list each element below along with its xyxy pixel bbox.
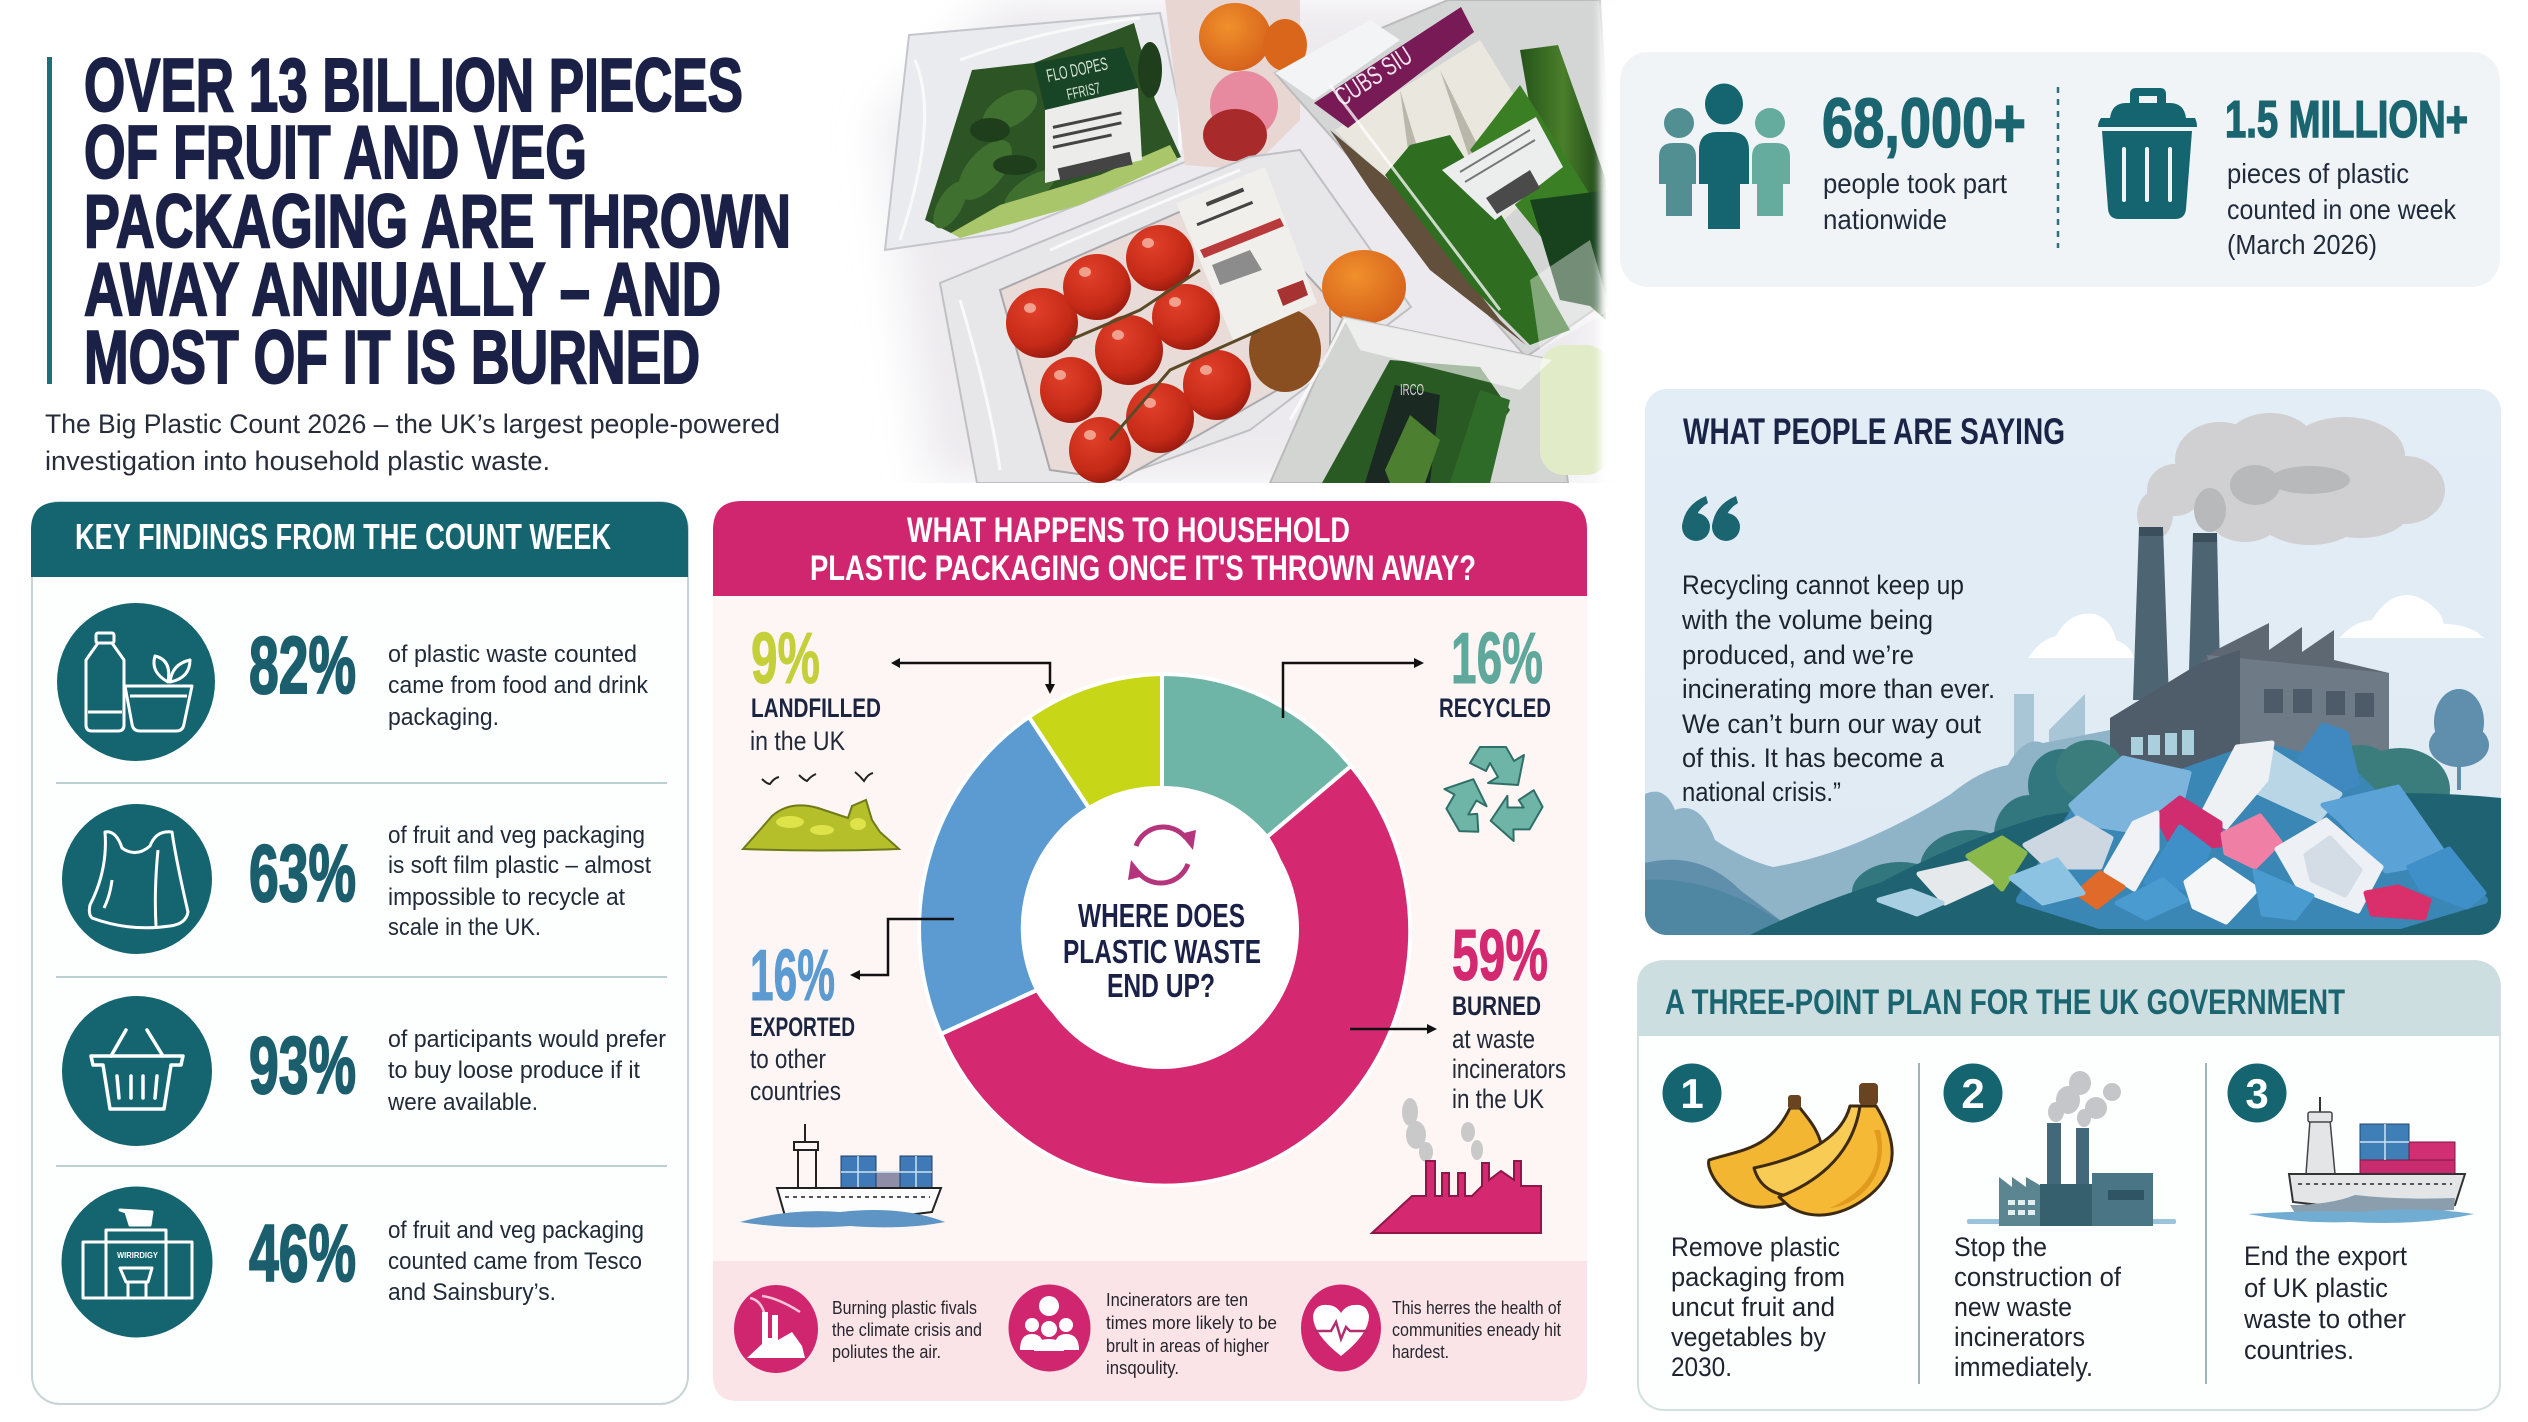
icon: heart with pulse bbox=[1301, 1284, 1381, 1372]
text: health: communities eneady hit bbox=[1392, 1320, 1561, 1340]
text: plan 2: immediately. bbox=[1954, 1352, 2093, 1382]
title accent bar bbox=[47, 57, 52, 384]
quote text: produced, and we’re bbox=[1682, 640, 1914, 670]
plan header bbox=[1637, 961, 2500, 1036]
text: plan 1 bbox=[1671, 1232, 1845, 1382]
text: burning plastic: Burning plastic fivals bbox=[832, 1298, 977, 1318]
key findings header bbox=[31, 502, 688, 577]
title: MOST OF IT IS BURNED bbox=[84, 315, 700, 399]
badge: 2 bbox=[1944, 1064, 2002, 1122]
text: plan 1: uncut fruit and bbox=[1671, 1292, 1835, 1322]
panel: headline stats bbox=[1620, 52, 2500, 287]
hero photo: packaged fruit and vegetables: IRCO bbox=[1400, 382, 1424, 399]
text: plan 2 bbox=[1954, 1232, 2121, 1382]
text: incinerators: Incinerators are ten bbox=[1106, 1290, 1248, 1310]
text: 63% description: impossible to recycle at bbox=[388, 884, 625, 911]
quote text: Recycling cannot keep up bbox=[1682, 570, 1964, 600]
label: 16% exported: to other bbox=[750, 1044, 826, 1074]
text: 82% description: of plastic waste counted bbox=[388, 641, 637, 668]
subtitle: The Big Plastic Count 2026 – the UK’s largest people-powered bbox=[45, 409, 780, 439]
icon: factory bbox=[1967, 1071, 2176, 1226]
text: 63% description: is soft film plastic – almost bbox=[388, 852, 651, 879]
label: 9% landfilled bbox=[750, 619, 881, 756]
hero photo: packaged fruit and vegetables: FLO DOPES bbox=[1045, 53, 1109, 86]
text: plan 2: incinerators bbox=[1954, 1322, 2085, 1352]
text: plan 3 bbox=[2243, 1241, 2407, 1365]
plan header: A THREE-POINT PLAN FOR THE UK GOVERNMENT bbox=[1665, 983, 2345, 1022]
label: 16% recycled: RECYCLED bbox=[1439, 693, 1551, 723]
text: incinerators bbox=[1106, 1290, 1277, 1378]
text: people took part: nationwide bbox=[1823, 204, 1947, 235]
icon: circular arrows bbox=[1128, 827, 1196, 883]
title: OVER 13 BILLION PIECES bbox=[84, 43, 743, 127]
hero photo: packaged fruit and vegetables: CUBS SIU bbox=[1329, 40, 1417, 112]
badge: 1: 1 bbox=[1680, 1070, 1704, 1117]
text: plan 2: construction of bbox=[1954, 1262, 2121, 1292]
subtitle bbox=[45, 409, 780, 476]
text: plan 1: packaging from bbox=[1671, 1262, 1845, 1292]
icon: three people bbox=[1659, 84, 1790, 229]
label: 16% exported: countries bbox=[750, 1076, 841, 1106]
label: 59% burned: in the UK bbox=[1452, 1084, 1544, 1114]
icon: burning plastic factory bbox=[734, 1285, 818, 1373]
text: health: hardest. bbox=[1392, 1342, 1449, 1362]
icon: landfill heap with birds bbox=[743, 772, 899, 850]
stat: 68,000+: 68,000+ bbox=[1822, 84, 2026, 162]
hero photo: packaged fruit and vegetables: FFRIS7 bbox=[1065, 80, 1102, 104]
text: 63% description: of fruit and veg packaging bbox=[388, 822, 645, 849]
text: burning plastic: poliutes the air. bbox=[832, 1342, 941, 1362]
quote illustration: factory and plastic pile bbox=[1645, 413, 2501, 935]
hero photo: packaged fruit and vegetables bbox=[880, 0, 1640, 483]
text: 63% description bbox=[388, 822, 651, 941]
label: 59% burned bbox=[1452, 916, 1566, 1114]
text: health bbox=[1392, 1298, 1562, 1362]
panel header: PLASTIC PACKAGING ONCE IT'S THROWN AWAY? bbox=[810, 549, 1476, 588]
title: OF FRUIT AND VEG bbox=[84, 110, 587, 194]
text: plan 3: of UK plastic bbox=[2244, 1273, 2388, 1303]
stat: 82%: 82% bbox=[249, 621, 356, 711]
stat: 46%: 46% bbox=[249, 1209, 356, 1299]
panel: key findings bbox=[31, 502, 688, 1404]
panel header: WHAT HAPPENS TO HOUSEHOLD bbox=[907, 511, 1350, 550]
donut centre label bbox=[1063, 897, 1261, 1004]
quote panel heading: WHAT PEOPLE ARE SAYING bbox=[1683, 411, 2065, 452]
label: 16% recycled bbox=[1439, 619, 1551, 723]
icon: soft plastic bag bbox=[62, 804, 212, 954]
label: 16% exported bbox=[750, 936, 855, 1106]
text: 93% description bbox=[387, 1026, 666, 1116]
label: 59% burned: BURNED bbox=[1452, 991, 1541, 1021]
text: pieces of plastic bbox=[2227, 158, 2457, 260]
stat: 63%: 63% bbox=[249, 829, 356, 919]
icon: recycling symbol bbox=[1437, 747, 1548, 845]
label: 9% landfilled: LANDFILLED bbox=[751, 693, 881, 723]
icon: pink incinerator bbox=[1372, 1098, 1541, 1233]
quote text: national crisis.” bbox=[1682, 777, 1841, 807]
quote text: with the volume being bbox=[1681, 605, 1933, 635]
panel: three-point plan bbox=[1637, 961, 2500, 1410]
quote text: of this. It has become a bbox=[1682, 743, 1945, 773]
label: 16% exported: 16% bbox=[750, 936, 835, 1016]
label: 59% burned: incinerators bbox=[1452, 1054, 1566, 1084]
footer band bbox=[713, 1261, 1587, 1401]
panel: what happens to household plastic bbox=[713, 501, 1587, 1401]
text: plan 1: 2030. bbox=[1671, 1352, 1732, 1382]
badge: 1 bbox=[1662, 1064, 1722, 1122]
arrow: burned bbox=[1350, 1024, 1437, 1034]
label: 59% burned: at waste bbox=[1452, 1024, 1535, 1054]
quote text: We can’t burn our way out bbox=[1682, 709, 1981, 739]
text: people took part bbox=[1823, 168, 2007, 235]
arrow: recycled bbox=[1283, 658, 1424, 718]
quote text: incinerating more than ever. bbox=[1682, 674, 1995, 704]
text: plan 2: Stop the bbox=[1954, 1232, 2047, 1262]
text: 63% description: scale in the UK. bbox=[388, 914, 541, 941]
icon: bottle and tub bbox=[57, 603, 215, 761]
text: 82% description: packaging. bbox=[388, 704, 499, 731]
panel header bbox=[713, 501, 1587, 596]
donut chart bbox=[919, 674, 1410, 1186]
text: incinerators: insqoulity. bbox=[1106, 1358, 1179, 1378]
label: 16% recycled: 16% bbox=[1451, 619, 1543, 699]
text: 93% description: were available. bbox=[387, 1089, 538, 1116]
arrow: exported bbox=[850, 919, 954, 980]
text: plan 2: new waste bbox=[1954, 1292, 2072, 1322]
icon: rubbish bin bbox=[2098, 88, 2197, 219]
text: 46% description bbox=[388, 1217, 644, 1306]
label: 59% burned: 59% bbox=[1452, 916, 1548, 996]
text: pieces of plastic: counted in one week bbox=[2227, 194, 2457, 225]
text: plan 1: vegetables by bbox=[1671, 1322, 1826, 1352]
text: incinerators: brult in areas of higher bbox=[1106, 1336, 1269, 1356]
icon: ship bbox=[2248, 1097, 2474, 1223]
text: pieces of plastic: (March 2026) bbox=[2227, 229, 2377, 260]
text: plan 1: Remove plastic bbox=[1671, 1232, 1840, 1262]
text: 93% description: of participants would prefer bbox=[388, 1026, 666, 1053]
quote text bbox=[1681, 570, 1995, 807]
icon: quotation mark bbox=[1682, 496, 1740, 541]
icon: supermarket bbox=[62, 1186, 212, 1338]
title bbox=[84, 43, 791, 399]
text: plan 3: countries. bbox=[2244, 1335, 2354, 1365]
text: 82% description bbox=[388, 641, 649, 731]
badge: 3 bbox=[2228, 1064, 2286, 1122]
panel: what people are saying bbox=[1645, 389, 2501, 935]
text: health: This herres the health of bbox=[1392, 1298, 1562, 1318]
key findings header: KEY FINDINGS FROM THE COUNT WEEK bbox=[75, 516, 611, 557]
text: 46% description: and Sainsbury’s. bbox=[388, 1279, 556, 1306]
badge: 2: 2 bbox=[1961, 1070, 1985, 1117]
label: 16% exported: EXPORTED bbox=[750, 1012, 855, 1042]
text: plan 3: End the export bbox=[2244, 1241, 2407, 1271]
icon: bananas bbox=[1709, 1083, 1892, 1215]
stat: 93%: 93% bbox=[249, 1021, 356, 1111]
icon: supermarket: WIRIRDIGY bbox=[117, 1251, 159, 1260]
badge: 3: 3 bbox=[2245, 1070, 2269, 1117]
icon: shopping basket bbox=[62, 996, 212, 1146]
text: incinerators: times more likely to be bbox=[1106, 1313, 1277, 1333]
text: 46% description: of fruit and veg packaging bbox=[388, 1217, 644, 1244]
title: PACKAGING ARE THROWN bbox=[84, 179, 791, 263]
title: AWAY ANNUALLY – AND bbox=[84, 247, 721, 331]
text: 46% description: counted came from Tesco bbox=[388, 1248, 642, 1275]
text: burning plastic bbox=[832, 1298, 982, 1362]
donut centre label: PLASTIC WASTE bbox=[1063, 933, 1261, 970]
text: people took part: people took part bbox=[1823, 168, 2007, 199]
text: burning plastic: the climate crisis and bbox=[832, 1320, 982, 1340]
subtitle: investigation into household plastic waste. bbox=[45, 446, 550, 476]
text: 82% description: came from food and drink bbox=[388, 672, 649, 699]
donut centre label: END UP? bbox=[1107, 967, 1215, 1004]
label: 9% landfilled: 9% bbox=[751, 619, 820, 699]
text: plan 3: waste to other bbox=[2243, 1304, 2406, 1334]
donut centre label: WHERE DOES bbox=[1078, 897, 1245, 934]
icon: container ship bbox=[740, 1124, 945, 1227]
arrow: landfilled bbox=[891, 658, 1055, 694]
icon: community people bbox=[1008, 1284, 1090, 1372]
label: 9% landfilled: in the UK bbox=[750, 726, 845, 756]
text: pieces of plastic: pieces of plastic bbox=[2227, 158, 2409, 189]
text: 93% description: to buy loose produce if it bbox=[388, 1057, 640, 1084]
